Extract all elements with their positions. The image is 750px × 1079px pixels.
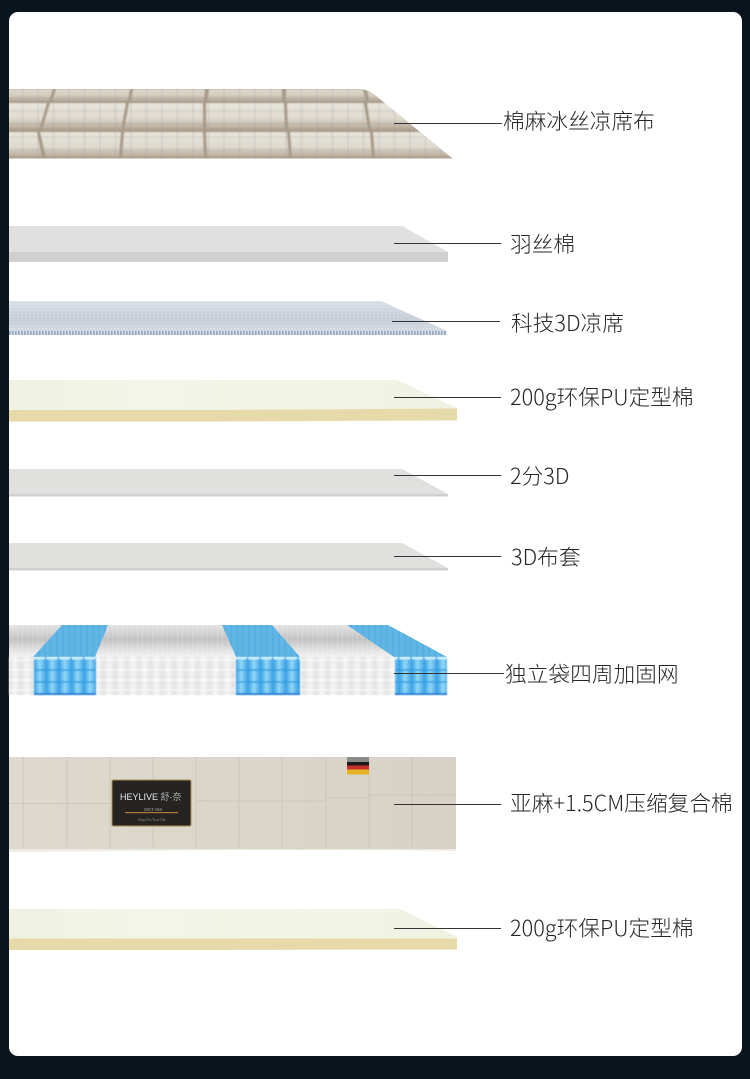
brand label: HEYLIVE 舒·奈 — [120, 792, 182, 802]
layer: feather cotton — [9, 226, 448, 262]
label: cotton linen cool fabric: 棉麻冰丝凉席布 — [503, 105, 655, 136]
leader lines — [392, 124, 504, 928]
layer: tech 3D cool mat — [9, 301, 447, 335]
blue spring bands — [33, 625, 447, 695]
label: 3D fabric cover: 3D布套 — [511, 541, 581, 572]
label: pocket spring: 独立袋四周加固网 — [505, 658, 679, 689]
label: tech 3D cool mat: 科技3D凉席 — [511, 307, 624, 338]
layer: 2 fen 3D — [9, 469, 448, 496]
layer: 200g PU foam lower — [9, 909, 457, 950]
brand label: SINCE 1968 — [144, 808, 162, 813]
label: 200g PU foam upper: 200g环保PU定型棉 — [510, 381, 694, 412]
layer: 200g PU foam upper — [9, 380, 457, 422]
brand label — [112, 780, 191, 826]
brand label: Heys For Your Life — [138, 818, 166, 823]
layer: pocket spring with reinforcement net — [9, 625, 447, 695]
layer: linen + 1.5CM compressed composite cotton — [9, 757, 456, 852]
label: feather cotton: 羽丝棉 — [510, 228, 575, 259]
label: 200g PU foam lower: 200g环保PU定型棉 — [510, 912, 694, 943]
layer: cotton linen quilted top — [2, 89, 460, 160]
layer: 3D fabric cover — [9, 543, 448, 570]
label: 2 fen 3D: 2分3D — [510, 460, 569, 491]
icon: German flag tag — [347, 757, 369, 774]
label: linen compressed cotton: 亚麻+1.5CM压缩复合棉 — [510, 787, 733, 818]
